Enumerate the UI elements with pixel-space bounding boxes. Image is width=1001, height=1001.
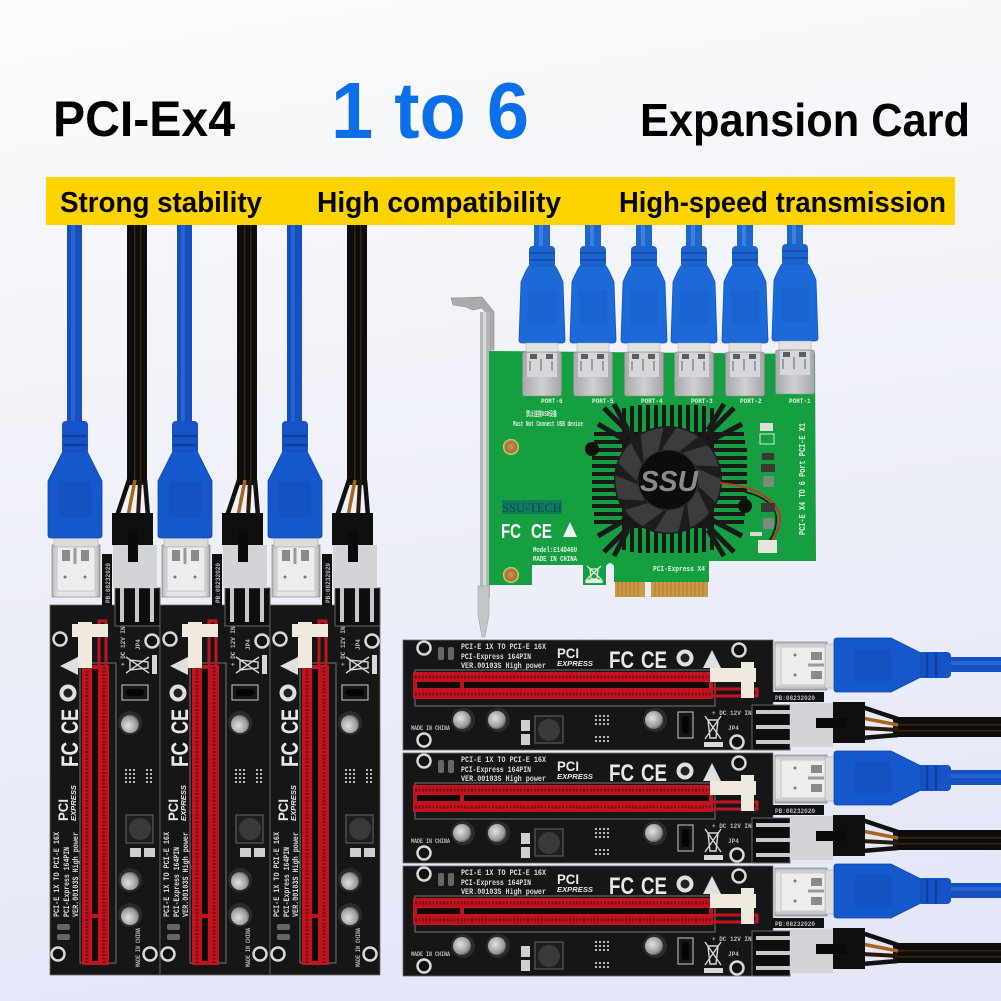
vertical riser board 1: VER.00103S High power — [72, 832, 81, 917]
horizontal riser board 3: PCI — [557, 871, 579, 887]
horizontal riser board 2: CE — [641, 760, 667, 787]
horizontal riser board 1: FC — [609, 647, 634, 674]
vertical riser board 3: FC — [277, 742, 304, 767]
horizontal riser board 3: + DC 12V IN — [712, 936, 752, 943]
model text: Model:E14D46U — [533, 547, 577, 555]
vertical riser board 2: CE — [167, 709, 194, 734]
port labels: PORT-3 — [691, 398, 713, 405]
horizontal riser board 3: EXPRESS — [557, 887, 593, 894]
vertical riser board 3 — [268, 209, 380, 975]
horizontal riser board 2: MADE IN CHINA — [411, 838, 450, 845]
horizontal riser board 1: PCI — [557, 645, 579, 661]
feature: high compatibility: High compatibility — [317, 187, 561, 219]
vertical riser board 2: PB:08232020 — [215, 563, 222, 603]
green circuit board — [489, 351, 816, 585]
horizontal riser board 3: PCI-E 1X TO PCI-E 16X — [461, 869, 546, 878]
vertical riser board 2: JP4 — [245, 639, 252, 650]
horizontal riser board 2: + DC 12V IN — [712, 823, 752, 830]
gold edge connector — [615, 582, 708, 597]
vertical riser board 3: PB:08232020 — [325, 563, 332, 603]
vertical riser board 3: PCI-E 1X TO PCI-E 16X — [273, 832, 282, 917]
port labels: PORT-4 — [641, 398, 663, 405]
expansion card: green PCB with ports and heatsink — [489, 220, 818, 597]
heading: Expansion Card: Expansion Card — [640, 94, 970, 146]
vertical riser board 3: PCI-Express 164PIN — [283, 847, 292, 917]
horizontal riser board 1: CE — [641, 647, 667, 674]
brand label: SSU-TECH — [502, 500, 562, 515]
feature: high-speed transmission: High-speed transmission — [619, 187, 946, 219]
horizontal riser board 1: PB:08232020 — [775, 695, 815, 702]
heading: 1 to 6: 1 to 6 — [331, 66, 529, 155]
heatsink fins — [592, 404, 747, 556]
port labels — [541, 398, 811, 405]
horizontal riser board 3: CE — [641, 873, 667, 900]
horizontal riser board 2: EXPRESS — [557, 774, 593, 781]
warning text — [513, 409, 583, 429]
horizontal riser board 3: PCI-Express 164PIN — [461, 879, 531, 888]
horizontal riser board 3: PB:08232020 — [775, 921, 815, 928]
row of six usb plugs — [519, 220, 818, 396]
vertical riser board 2: PCI — [165, 799, 181, 821]
heading: PCI-Ex4: PCI-Ex4 — [53, 91, 235, 147]
vertical riser board 3: JP4 — [355, 639, 362, 650]
port labels: PORT-5 — [592, 398, 614, 405]
horizontal riser board 1: VER.00103S High power — [461, 662, 546, 671]
vertical riser board 2: MADE IN CHINA — [245, 928, 252, 967]
vertical riser board 2 — [158, 209, 270, 975]
vertical riser board 1: PCI — [55, 799, 71, 821]
vertical riser board 3: PCI — [275, 799, 291, 821]
vertical riser board 3: MADE IN CHINA — [355, 928, 362, 967]
certification marks — [501, 521, 577, 543]
horizontal riser board 2: PCI-Express 164PIN — [461, 766, 531, 775]
horizontal riser board 1: MADE IN CHINA — [411, 725, 450, 732]
bus label: PCI-Express X4 — [653, 566, 705, 574]
vertical riser board 1: FC — [57, 742, 84, 767]
vertical riser board 2: VER.00103S High power — [182, 832, 191, 917]
warning text: Must Not Connect USB device — [513, 421, 583, 429]
vertical riser board 1: MADE IN CHINA — [135, 928, 142, 967]
vertical riser board 1: PCI-E 1X TO PCI-E 16X — [53, 832, 62, 917]
vertical riser board 3: + DC 12V IN — [340, 626, 347, 666]
horizontal riser board 3 — [403, 864, 1001, 976]
screws — [503, 439, 752, 583]
horizontal riser board 2: VER.00103S High power — [461, 775, 546, 784]
horizontal riser board 2: PCI — [557, 758, 579, 774]
vertical riser board 2: FC — [167, 742, 194, 767]
vertical riser board 1: PB:08232020 — [105, 563, 112, 603]
horizontal riser board 1 — [403, 638, 1001, 750]
horizontal riser board 1: JP4 — [728, 725, 739, 732]
horizontal riser board 3: FC — [609, 873, 634, 900]
horizontal riser board 2 — [403, 751, 1001, 863]
horizontal riser board 1: PCI-E 1X TO PCI-E 16X — [461, 643, 546, 652]
feature: strong stability: Strong stability — [60, 187, 262, 219]
horizontal riser board 3: VER.00103S High power — [461, 888, 546, 897]
small components — [750, 423, 775, 536]
vertical riser board 3: VER.00103S High power — [292, 832, 301, 917]
vertical riser board 1 — [48, 209, 160, 975]
vertical riser board 1: PCI-Express 164PIN — [63, 847, 72, 917]
vertical riser board 1: CE — [57, 709, 84, 734]
vertical riser board 2: + DC 12V IN — [230, 626, 237, 666]
horizontal riser board 2: PB:08232020 — [775, 808, 815, 815]
certification marks: FC — [501, 521, 521, 543]
model text: MADE IN CHINA — [533, 556, 578, 564]
vertical riser board 1: + DC 12V IN — [120, 626, 127, 666]
fan with SSU hub — [608, 421, 724, 539]
vertical riser board 3: EXPRESS — [291, 785, 298, 821]
horizontal riser board 2: PCI-E 1X TO PCI-E 16X — [461, 756, 546, 765]
vertical riser board 2: PCI-Express 164PIN — [173, 847, 182, 917]
bracket: metal PCI bracket — [451, 297, 494, 637]
horizontal riser board 3: MADE IN CHINA — [411, 951, 450, 958]
vertical riser board 1: JP4 — [135, 639, 142, 650]
certification marks: CE — [531, 521, 552, 543]
horizontal riser board 1: + DC 12V IN — [712, 710, 752, 717]
horizontal riser board 1: EXPRESS — [557, 661, 593, 668]
vertical riser board 3: CE — [277, 709, 304, 734]
vertical riser board 2: PCI-E 1X TO PCI-E 16X — [163, 832, 172, 917]
vertical riser board 1: EXPRESS — [71, 785, 78, 821]
warning text: 禁止连接USB设备 — [526, 409, 557, 419]
horizontal riser board 3: JP4 — [728, 951, 739, 958]
horizontal riser board 1: PCI-Express 164PIN — [461, 653, 531, 662]
port labels: PORT-6 — [541, 398, 563, 405]
power wire and connector — [720, 483, 780, 553]
horizontal riser board 2: FC — [609, 760, 634, 787]
fan with SSU hub: SSU — [640, 466, 699, 498]
recycling bin mark — [586, 566, 602, 582]
port labels: PORT-2 — [740, 398, 762, 405]
feature bar — [46, 177, 955, 225]
vertical model text: PCI-E X4 TO 6 Port PCI-E X1 — [798, 423, 808, 535]
horizontal riser board 2: JP4 — [728, 838, 739, 845]
vertical riser board 2: EXPRESS — [181, 785, 188, 821]
model text — [533, 547, 578, 564]
port labels: PORT-1 — [789, 398, 811, 405]
